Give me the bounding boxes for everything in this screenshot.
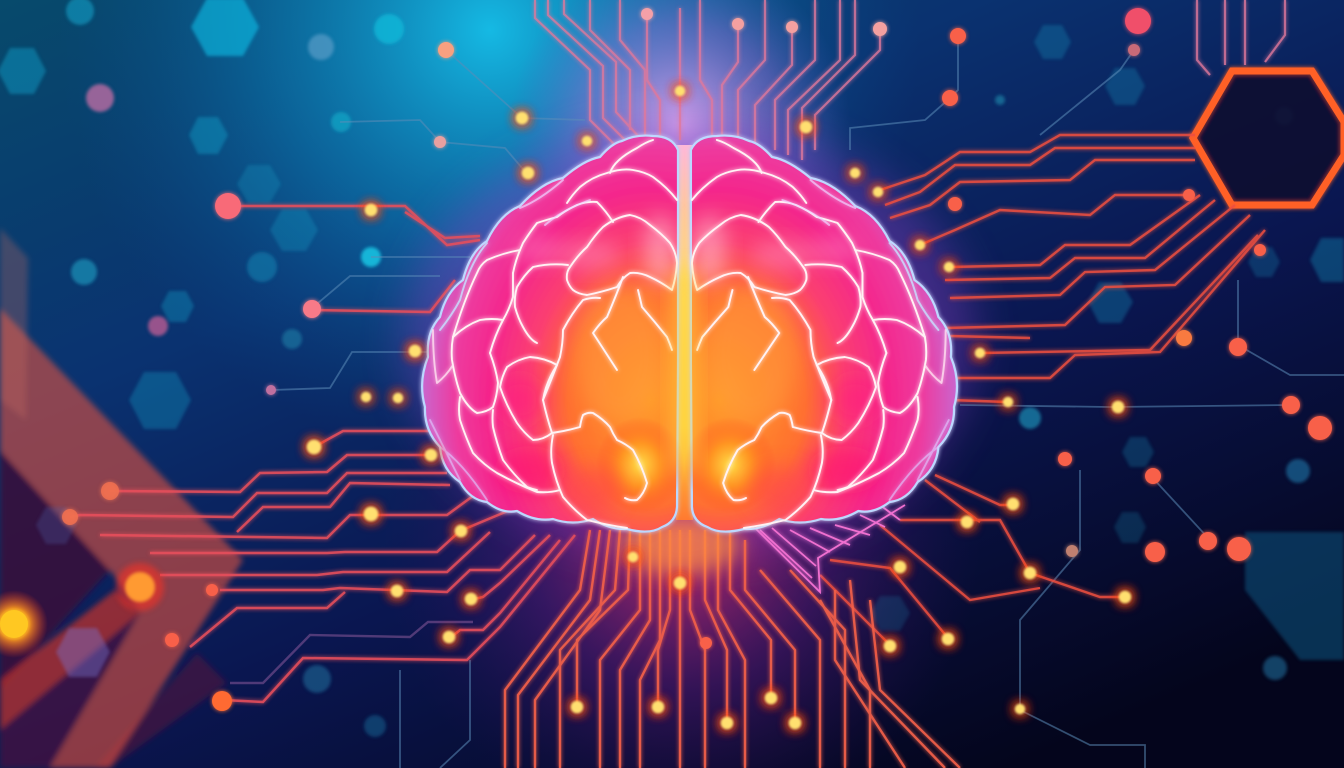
circuit traces: bottom xyxy=(505,530,960,768)
glow under the brain xyxy=(620,515,740,575)
bright orbs, lower left xyxy=(0,563,164,658)
centre seam xyxy=(672,150,696,515)
centre seam backing xyxy=(676,145,693,520)
cerebellum xyxy=(752,505,905,592)
translucent orange chevron, lower left xyxy=(0,228,243,768)
right hemisphere xyxy=(685,136,957,532)
large orange hexagon, upper right xyxy=(1193,71,1344,205)
circuit traces: left xyxy=(70,206,575,702)
left hemisphere xyxy=(422,136,684,532)
circuit traces: right xyxy=(820,135,1265,645)
faint secondary traces xyxy=(230,36,1344,768)
circuit traces: top xyxy=(535,0,1285,160)
brain xyxy=(422,136,957,532)
glowing nodes xyxy=(307,86,1131,729)
